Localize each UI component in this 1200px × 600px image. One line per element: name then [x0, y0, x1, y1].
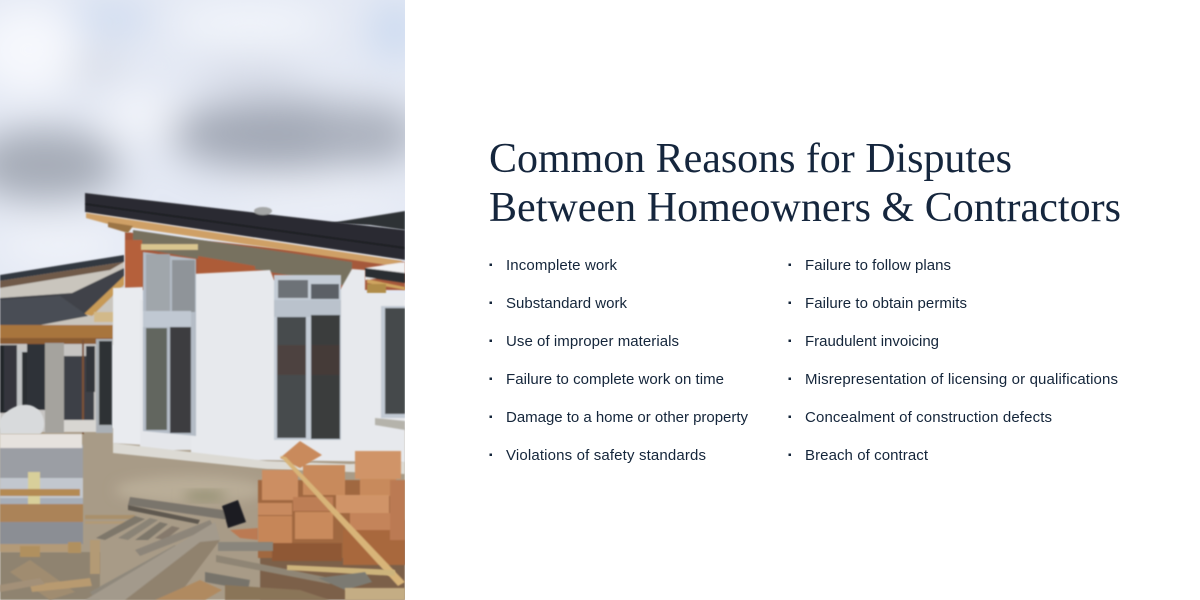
list: right column: Failure to follow plans: [805, 257, 951, 274]
white sack: [0, 405, 44, 434]
pile of scrap lumber: [0, 497, 405, 600]
back right roof: [330, 211, 405, 230]
list: left column: Violations of safety standards: [506, 447, 706, 464]
list: right column: Failure to obtain permits: [805, 295, 967, 312]
white wall: [113, 269, 405, 474]
list: left column: Damage to a home or other property: [506, 409, 748, 426]
list: left column: Failure to complete work on time: [506, 371, 724, 388]
windows: [141, 244, 405, 440]
ground: [0, 428, 405, 600]
heading: [489, 136, 1121, 231]
heading: Between Homeowners & Contractors: [489, 185, 1121, 231]
main roof fascia: [85, 193, 405, 294]
list: right column: Breach of contract: [805, 447, 929, 464]
list: right column: Concealment of construction defects: [805, 409, 1052, 426]
sky with clouds: [0, 0, 420, 300]
list: right column: Fraudulent invoicing: [805, 333, 939, 350]
list: left column: [490, 257, 748, 464]
photo: house under construction: [0, 0, 420, 600]
stacked orange bricks: [258, 441, 405, 586]
list: left column: Use of improper materials: [506, 333, 679, 350]
list: right column: [788, 257, 1118, 464]
list: left column: Substandard work: [506, 295, 628, 312]
wrapped pallet of blocks: [0, 434, 83, 557]
list: left column: Incomplete work: [506, 257, 618, 274]
heading: Common Reasons for Disputes: [489, 136, 1012, 182]
list: right column: Misrepresentation of licensing or qualifications: [805, 371, 1118, 388]
brick upper wall: [125, 230, 405, 290]
left background building: [0, 255, 124, 434]
